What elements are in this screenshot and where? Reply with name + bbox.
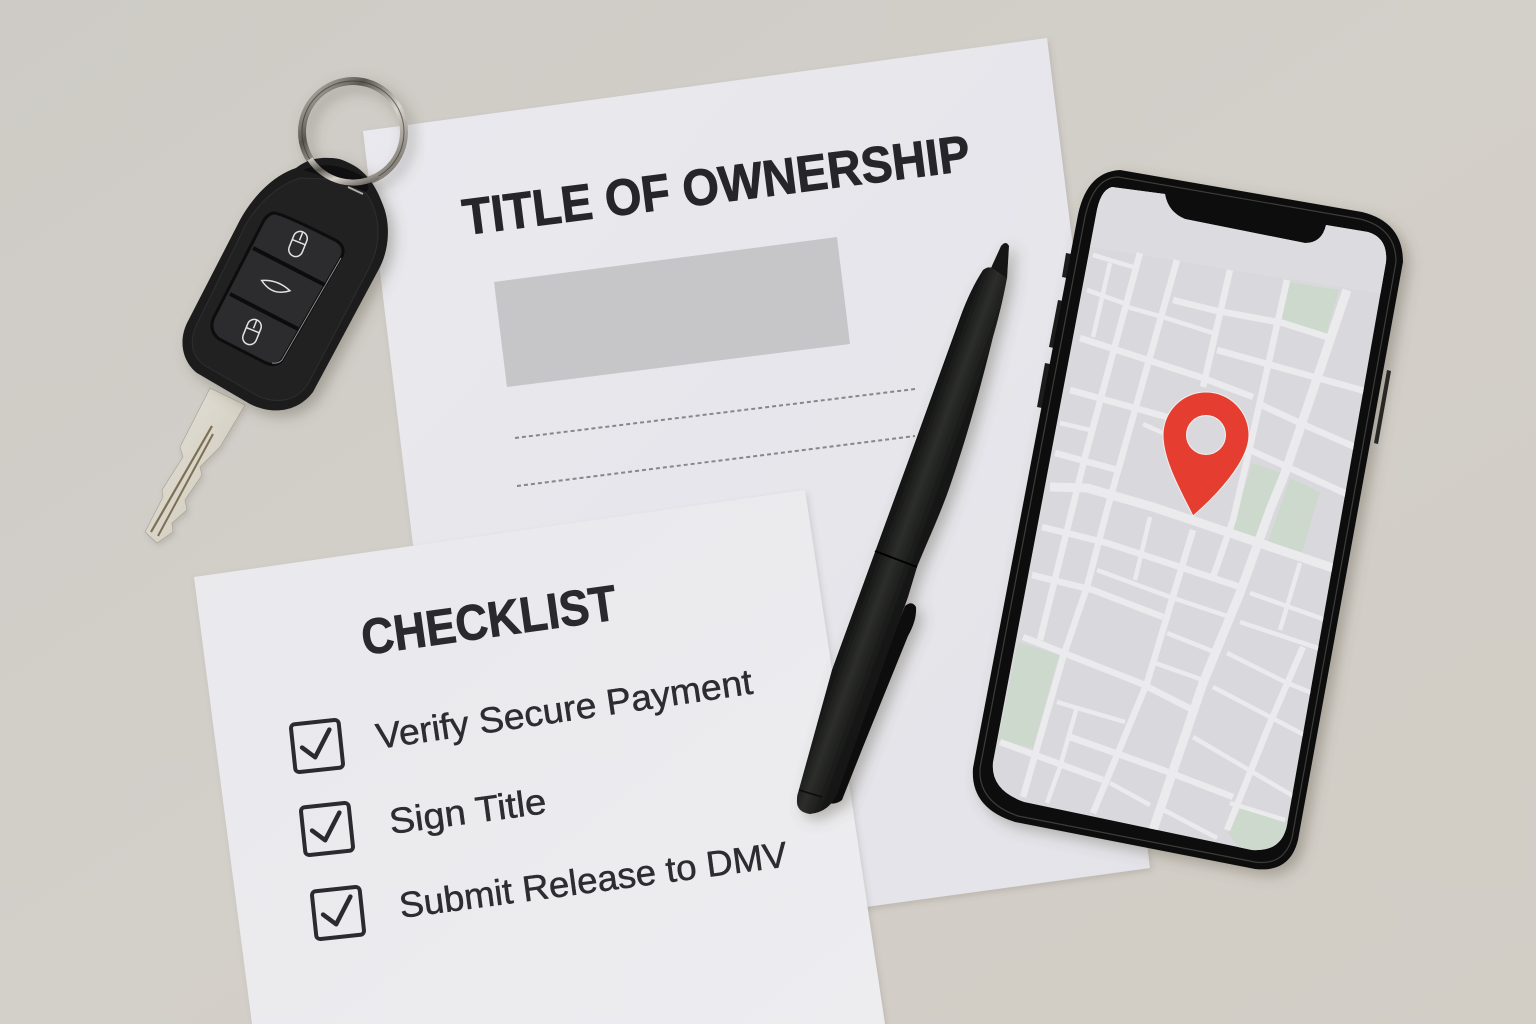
pen barrel bbox=[797, 267, 1007, 814]
panel: checklist sheet bbox=[194, 490, 885, 1024]
icon: key fob bbox=[182, 158, 388, 410]
key fob buttons bbox=[212, 213, 343, 365]
icon: black pen bbox=[797, 243, 1009, 814]
key fob lug and ring loop bbox=[303, 159, 378, 194]
checklist item: sign title: Sign Title bbox=[387, 780, 549, 842]
icon: unlock glyph bbox=[241, 317, 263, 347]
checklist item: sign title bbox=[301, 780, 549, 855]
icon: lock glyph bbox=[287, 229, 309, 259]
phone body bbox=[973, 170, 1403, 869]
heading: checklist: CHECKLIST bbox=[358, 575, 620, 666]
dotted signature lines bbox=[515, 389, 915, 486]
heading: title of ownership: TITLE OF OWNERSHIP bbox=[459, 124, 973, 246]
pen tip bbox=[991, 243, 1009, 279]
map roads bbox=[1000, 253, 1390, 838]
checklist item: submit release to dmv: Submit Release to DMV bbox=[397, 834, 790, 926]
flat-lay scene bbox=[144, 38, 1415, 1024]
icon: red location pin bbox=[1163, 392, 1249, 516]
panel: smartphone bbox=[960, 170, 1420, 870]
notch sensor dots bbox=[1232, 209, 1284, 222]
pen clip bbox=[828, 603, 916, 804]
checklist item: verify secure payment bbox=[291, 661, 755, 772]
checklist item: verify secure payment: Verify Secure Payment bbox=[373, 661, 755, 757]
checklist item: submit release to dmv bbox=[312, 834, 790, 939]
icon: key ring bbox=[302, 81, 404, 183]
panel: title of ownership document bbox=[363, 38, 1150, 907]
phone screen with map bbox=[992, 187, 1386, 850]
map parks bbox=[998, 282, 1339, 855]
grey redacted block bbox=[494, 237, 850, 387]
icon: trunk glyph bbox=[260, 278, 291, 296]
icon: key blade bbox=[145, 388, 245, 543]
